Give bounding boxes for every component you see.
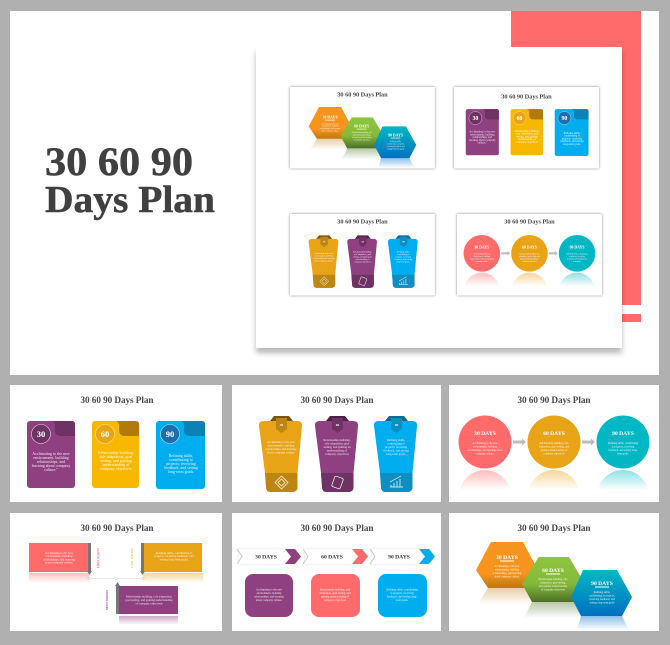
card: 30: culture.": [44, 467, 58, 472]
box: 60 days text: gaining understanding of: [321, 596, 349, 598]
card: 30: learning about company: [32, 463, 70, 468]
thumbnail: circles: gaining understanding of: [520, 258, 539, 261]
hexagon: 90 days: contributing to projects,: [589, 594, 615, 598]
panel: timeline slide: [10, 513, 222, 631]
box: 30 days text: Acclimating to the new: [256, 588, 282, 592]
thumbnail: circles: Acclimating to the new: [473, 253, 491, 256]
hexagon: 90 days: Refining skills,: [594, 591, 611, 594]
card: 60: Relationship-building,: [98, 450, 134, 456]
thumbnail: tapered cards: contributing to: [397, 253, 409, 256]
thumbnail: hexagons: about company culture.: [321, 131, 339, 133]
hexagon: 30 days: about company culture.: [494, 576, 520, 578]
box: 90 days text: Refining skills, contributing: [386, 588, 418, 592]
heading: main title: 30 60 90: [45, 139, 193, 184]
slide title: 30 60 90 Days Plan: [80, 395, 154, 405]
card: 30: relationships, and: [37, 459, 65, 465]
circle: 90 days: to projects, receiving: [612, 446, 635, 448]
coral accent frame: [511, 11, 641, 322]
thumbnail: tabbed cards: role adaptation, goal: [516, 133, 539, 136]
card: 90: 90: [395, 423, 398, 427]
card: 90: Refining skills,: [169, 453, 193, 459]
box: 30 days text: [245, 574, 293, 617]
panel: tapered cards slide: [232, 385, 441, 502]
step: 30 days: [237, 549, 301, 564]
card: 90: feedback, and setting: [383, 448, 409, 454]
hexagon: 60 days: adaptation, goal setting,: [540, 582, 566, 584]
thumbnail: tapered cards: environment, building: [315, 254, 333, 257]
thumbnail: hexagons: Refining skills,: [390, 140, 402, 143]
card: 30: 30: [37, 429, 45, 439]
circle: 60 days: 60 DAYS: [543, 431, 565, 437]
thumbnail: circles: 60 DAYS: [522, 246, 537, 250]
box: 60 days text: Relationship-building, role: [320, 588, 351, 592]
thumbnail: tapered cards: long-term goals.: [396, 260, 410, 263]
hexagon: 30 days: Acclimating to the new: [494, 565, 520, 568]
step: 90 days: 90 DAYS: [388, 554, 410, 560]
thumbnail: circles: to projects, receiving: [569, 255, 585, 258]
thumbnail: hexagons: adaptation, goal setting,: [353, 134, 371, 137]
thumbnail: tapered cards: 30: [323, 240, 326, 243]
panel: chevrons slide: [232, 513, 441, 631]
thumbnail: tabbed cards: setting, and gaining: [516, 135, 539, 138]
circle: 30 days: company culture.: [476, 452, 495, 456]
hexagon: 90 days: setting long-term goals: [590, 602, 614, 604]
circle: 30 days: 30 DAYS: [474, 431, 496, 437]
hexagon: 60 days: of company objectives: [541, 588, 565, 592]
card: 90: projects, receiving: [385, 445, 408, 450]
thumbnail: hexagons: Relationship-building, role: [352, 131, 372, 134]
thumbnail: tabbed cards: long-term goals.: [563, 143, 581, 146]
card: 30: [27, 421, 75, 488]
card: 90: contributing to: [387, 442, 405, 446]
thumbnail: tabbed cards: relationships, and: [473, 136, 493, 139]
circle: 60 days: Relationship-building, role: [540, 442, 569, 445]
icon: growth chart: [390, 476, 403, 487]
card: 60: setting, and gaining: [100, 458, 132, 464]
box: 30 days text: relationships, and learning: [254, 596, 284, 598]
thumbnail: tabbed cards: 60: [517, 116, 523, 122]
card: 60: understanding of: [102, 462, 130, 467]
hexagon: 30 days: relationships, and learning: [493, 572, 522, 575]
circle: 60 days: adaptation, goal setting, and: [539, 446, 570, 448]
thumbnail: hexagons: contributing to projects,: [387, 143, 405, 146]
card: 30: Acclimating to the new: [32, 451, 70, 456]
thumbnail: hexagons: [290, 87, 435, 168]
block: next 30 days: of company objectives: [135, 602, 163, 606]
circle: 90 days: 90 DAYS: [612, 431, 634, 437]
card: 60: 60: [101, 429, 109, 439]
thumbnail: circles: term goals.: [573, 260, 582, 263]
thumbnail: tabbed cards: Refining skills,: [564, 132, 581, 135]
hexagon: 90 days: receiving feedback, and: [589, 598, 615, 601]
thumbnail: tapered cards: relationships and learning: [313, 257, 334, 260]
circle: 90 days: Refining skills, contributing: [608, 442, 639, 445]
thumbnail: tabbed cards: 30: [472, 116, 478, 122]
thumbnail: tabbed cards: company objectives: [516, 141, 538, 144]
card: 90: feedback, and setting: [164, 465, 198, 471]
panel: tabbed cards slide: [10, 385, 222, 502]
slide title: 30 60 90 Days Plan: [518, 395, 590, 405]
panel: circles slide: [449, 385, 659, 502]
card: 30: 30: [280, 423, 284, 427]
circle: 90 days: term goals.: [617, 452, 629, 456]
hexagon: 60 days: [522, 557, 585, 618]
card: 60: company objectives: [325, 452, 350, 456]
card: 90: long-term goals.: [386, 452, 406, 456]
panel: hexagons slide: [449, 513, 659, 631]
card: 30: environment, building: [268, 444, 295, 448]
thumbnail: tapered cards: Relationship-building,: [353, 251, 372, 254]
card: 60: company objectives: [100, 466, 132, 471]
block: first 30 days: [29, 543, 100, 583]
card: 30: environment, building: [33, 455, 69, 461]
hexagon: 60 days: and gaining understanding: [539, 585, 568, 588]
thumbnail: circles: Relationship-building, role: [519, 253, 540, 256]
card: 60: role adaptation, goal: [100, 454, 133, 460]
thumbnail: tabbed cards: 30 60 90 Days Plan: [501, 94, 552, 101]
card: 60: role adaptation, goal: [325, 442, 349, 446]
thumbnail: tapered cards: role adaptation, goal: [354, 253, 371, 256]
block: last 30 days: projects, receiving feedback, and: [154, 554, 194, 559]
hexagon: 30 days: environment, building: [495, 568, 520, 572]
circle: 60 days: company objectives: [543, 452, 565, 456]
card: 60: [92, 421, 139, 488]
white preview panel: [256, 47, 622, 348]
card: 90: 90: [166, 429, 174, 439]
circle: 30 days: relationships, and learning about: [467, 449, 503, 452]
thumbnail: tabbed cards: Relationship-building,: [515, 130, 540, 133]
card: 30: Acclimating to the new: [267, 440, 296, 444]
thumbnail: hexagons: relationships, and learning: [320, 127, 340, 130]
circle: 90 days: feedback, and setting long-: [608, 449, 638, 452]
thumbnail: tapered cards: [290, 214, 435, 295]
block: next 30 days: NEXT 30 DAYS: [105, 590, 109, 610]
hexagon: 30 days: [476, 542, 538, 604]
card: 60: 60: [336, 423, 340, 427]
thumbnail: hexagons: 30 DAYS: [323, 116, 338, 120]
step: 60 days: [303, 549, 368, 564]
thumbnail: tabbed cards: 90: [561, 116, 567, 122]
thumbnail: hexagons: 90 DAYS: [388, 134, 403, 138]
thumbnail: tabbed cards: feedback, and setting: [560, 140, 584, 143]
box: 90 days text: feedback, and setting long-: [387, 596, 417, 598]
card: 60: Relationship-building,: [324, 438, 351, 443]
block: first 30 days: FIRST 30 DAYS: [96, 547, 100, 568]
thumbnail: hexagons: Acclimating to the new: [321, 122, 339, 125]
panel: hero: [10, 11, 659, 375]
thumbnail: tabbed cards: projects, receiving: [562, 137, 583, 140]
block: first 30 days: relationships, and learning: [43, 557, 75, 562]
thumbnail: hexagons: environment, building: [322, 125, 338, 128]
thumbnail: circles: adaptation, goal setting, and: [519, 255, 540, 258]
card: 60: [315, 416, 358, 492]
circle: 30 days: environment, building: [473, 446, 498, 448]
hexagon: 90 days: 90 DAYS: [591, 581, 613, 587]
box: 30 days text: about company culture.: [256, 599, 282, 602]
hexagon: 30 days: 30 DAYS: [496, 555, 518, 561]
card: 60: setting, and gaining an: [323, 445, 351, 450]
thumbnail: tapered cards: about company culture.: [314, 260, 334, 262]
circle: 60 days: gaining understanding of: [541, 449, 568, 452]
box: 90 days text: [378, 574, 427, 617]
thumbnail: circles: feedback, and setting long-: [567, 258, 588, 261]
block: first 30 days: Acclimating to the new: [45, 551, 74, 555]
box: 30 days text: environment, building: [257, 592, 282, 595]
card: 30: relationships and learning: [266, 447, 297, 451]
slide title: 30 60 90 Days Plan: [80, 523, 154, 533]
thumbnail: circles: company culture.: [475, 261, 489, 263]
thumbnail: tapered cards: setting, and gaining an: [353, 255, 372, 258]
slide title: 30 60 90 Days Plan: [300, 523, 374, 533]
circle: 60 days: [528, 416, 580, 490]
thumbnail: tabbed cards: understanding of: [518, 138, 537, 141]
box: 60 days text: company objectives: [324, 599, 346, 602]
block: last 30 days: [130, 543, 203, 583]
block: first 30 days: environment, building: [46, 554, 73, 559]
thumbnail: hexagons: of company objectives: [353, 138, 370, 141]
thumbnail: tapered cards: Refining skills,: [397, 251, 410, 254]
block: last 30 days: setting long-term goals.: [160, 557, 188, 561]
thumbnail: tapered cards: company objectives: [354, 261, 371, 263]
hexagon: 90 days: [571, 570, 632, 630]
thumbnail: tapered cards: feedback, and setting: [394, 258, 412, 261]
thumbnail: circles: [457, 214, 602, 295]
circle: 30 days: [458, 416, 512, 490]
thumbnail: hexagons: setting long-term goals: [387, 147, 404, 150]
hexagon: 60 days: 60 DAYS: [542, 568, 564, 574]
thumbnail: circles: 30 60 90 Days Plan: [504, 219, 555, 226]
slide title: 30 60 90 Days Plan: [300, 395, 374, 405]
card: 30: about company culture.: [267, 450, 295, 454]
card: 90: projects, receiving: [166, 461, 196, 467]
thumbnail: circles: 90 DAYS: [570, 246, 585, 250]
thumbnail: tabbed cards: culture.": [478, 142, 487, 145]
thumbnail: tapered cards: 90: [402, 240, 406, 243]
block: last 30 days: LAST 30 DAYS: [130, 548, 134, 568]
card: 90: [156, 421, 205, 489]
card: 30: [259, 416, 302, 492]
arrow: [513, 438, 526, 446]
card: 90: contributing to: [169, 457, 193, 462]
circle: 90 days: [596, 416, 650, 490]
box: 60 days text: adaptation, goal setting, and: [319, 592, 351, 595]
card: 90: long-term goals.: [168, 469, 194, 474]
step: 60 days: 60 DAYS: [321, 554, 343, 560]
block: last 30 days: Refining skills, contributing to: [156, 551, 193, 556]
hexagon: 60 days: Relationship-building, role: [539, 578, 568, 581]
icon: target: [275, 476, 288, 489]
block: next 30 days: Relationship-building, role adaptation,: [126, 594, 172, 600]
thumbnail: circles: 30 DAYS: [474, 246, 489, 250]
thumbnail: circles: relationships, and learning about: [470, 258, 494, 261]
box: 90 days text: term goals.: [396, 599, 409, 602]
timeline line: [88, 577, 144, 580]
thumbnail: tabbed cards: environment, building: [470, 133, 495, 136]
thumbnail: hexagons: and gaining understanding: [352, 136, 372, 139]
thumbnail: circles: Refining skills, contributing: [567, 253, 588, 256]
thumbnail: hexagons: 60 DAYS: [354, 125, 369, 129]
slide title: 30 60 90 Days Plan: [518, 523, 590, 533]
block: next 30 days: goal setting, and gaining understanding: [125, 598, 173, 603]
thumbnail: tapered cards: 30 60 90 Days Plan: [337, 219, 388, 226]
step: 90 days: [370, 549, 435, 564]
thumbnail: tabbed cards: [454, 87, 599, 168]
card: 90: [374, 416, 417, 492]
block: next 30 days: [105, 582, 178, 625]
thumbnail: hexagons: receiving feedback, and: [387, 145, 404, 148]
thumbnail: tapered cards: understanding of: [355, 258, 370, 261]
thumbnail: tabbed cards: learning about company: [469, 139, 496, 142]
step: 30 days: 30 DAYS: [255, 554, 277, 560]
thumbnail: tapered cards: Acclimating to the new: [314, 252, 334, 255]
thumbnail: circles: company objectives: [522, 261, 537, 263]
thumbnail: circles: environment, building: [474, 255, 490, 258]
icon: document: [331, 476, 344, 489]
card: 90: Refining skills,: [387, 438, 405, 443]
box: 60 days text: [311, 574, 360, 617]
thumbnail: tapered cards: 60: [362, 240, 365, 243]
thumbnail: tabbed cards: Acclimating to the new: [469, 131, 495, 134]
card: 60: understanding of: [327, 448, 347, 452]
box: 90 days text: to projects, receiving: [390, 592, 414, 595]
circle: 30 days: Acclimating to the new: [472, 442, 498, 445]
heading: main title second line: Days Plan: [45, 179, 215, 221]
thumbnail: tapered cards: projects, receiving: [396, 255, 411, 258]
block: first 30 days: about company culture.: [45, 561, 73, 565]
arrow: [582, 438, 595, 446]
thumbnail: hexagons: 30 60 90 Days Plan: [337, 92, 388, 99]
thumbnail: tabbed cards: contributing to: [564, 135, 581, 138]
